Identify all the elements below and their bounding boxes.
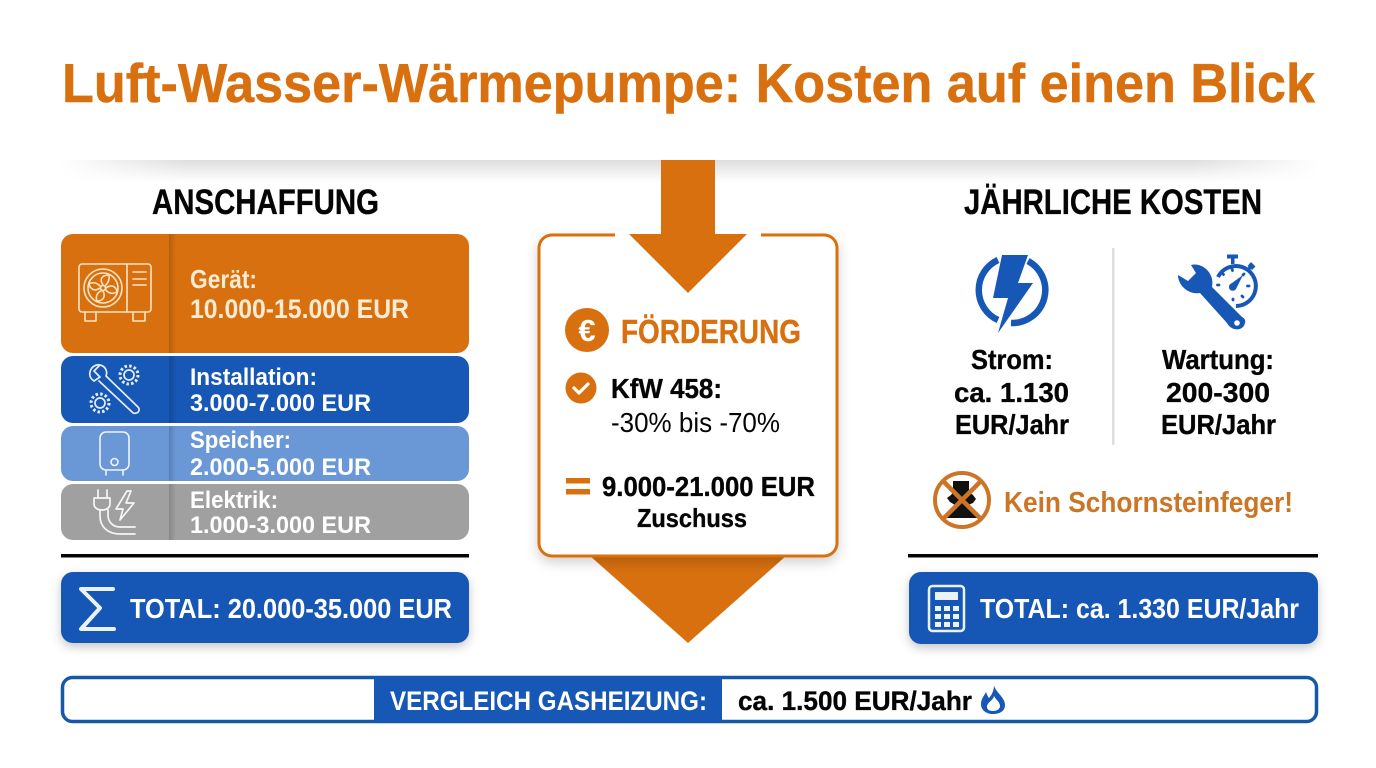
text: Zuschuss: Zuschuss — [637, 503, 747, 533]
arrow: bottom — [589, 555, 787, 643]
icon: euro: € — [578, 313, 596, 348]
row: Speicher — [61, 426, 469, 481]
text: grant amount: 9.000-21.000 EUR — [602, 471, 815, 502]
text: Speicher: Speicher: — [190, 427, 291, 454]
heading: Anschaffung: ANSCHAFFUNG — [152, 183, 379, 222]
icon: sum — [81, 589, 114, 629]
panel: jährliche Kosten — [908, 183, 1318, 644]
value: Speicher: 2.000-5.000 EUR — [190, 454, 371, 481]
panel: Anschaffung — [61, 183, 469, 643]
icon: equals — [566, 478, 590, 494]
text: total: TOTAL: 20.000-35.000 EUR — [130, 593, 452, 624]
text: Wartung unit: EUR/Jahr — [1161, 409, 1276, 440]
icon: check — [566, 372, 596, 404]
text: Strom label: Strom: — [971, 344, 1053, 375]
header shadow — [92, 160, 1288, 176]
box: Förderung — [539, 235, 837, 556]
panel: Förderung — [539, 160, 837, 643]
icon: wrench and gears — [90, 365, 139, 413]
text: Installation: Installation: — [190, 364, 317, 391]
icon: calculator — [929, 586, 964, 631]
text: Elektrik: Elektrik: — [190, 487, 278, 514]
value: Gerät: 10.000-15.000 EUR — [190, 294, 409, 324]
text: Wartung value: 200-300 — [1166, 377, 1270, 408]
text: Strom unit: EUR/Jahr — [955, 409, 1069, 440]
row: Installation — [61, 356, 469, 423]
row: Elektrik — [61, 484, 469, 540]
icon: air-source outdoor unit — [79, 264, 151, 321]
heading: jährliche Kosten: JÄHRLICHE KOSTEN — [964, 183, 1262, 222]
text: Gerät: Gerät: — [190, 264, 257, 294]
value: Elektrik: 1.000-3.000 EUR — [190, 512, 371, 539]
text: KfW 458: KfW 458: — [611, 373, 722, 404]
value: Installation: 3.000-7.000 EUR — [190, 390, 371, 417]
title: Luft-Wasser-Wärmepumpe: Kosten auf einen Blick — [62, 52, 1315, 114]
total box: jährlich — [909, 572, 1318, 644]
icon: lightning — [979, 255, 1045, 333]
arrow: top — [629, 160, 747, 293]
icon: wrench and stopwatch — [1178, 254, 1256, 329]
text: Wartung label: Wartung: — [1162, 344, 1274, 375]
icon: storage tank — [100, 432, 129, 475]
icon: gas flame — [981, 685, 1005, 714]
text: Strom value: ca. 1.130 — [954, 377, 1069, 408]
icon: euro — [565, 308, 609, 352]
text: comparison value: ca. 1.500 EUR/Jahr — [738, 686, 972, 716]
text: percent range: -30% bis -70% — [611, 407, 780, 438]
text: no chimney sweep: Kein Schornsteinfeger! — [1004, 487, 1293, 519]
icon: plug and bolt — [94, 490, 135, 534]
row: Gerät — [61, 234, 469, 353]
comparison bar: Gasheizung — [62, 677, 1316, 722]
icon: no chimney sweep — [935, 473, 989, 527]
text: comparison label: VERGLEICH GASHEIZUNG: — [390, 686, 707, 716]
heading: Förderung: FÖRDERUNG — [621, 313, 801, 350]
text: total: TOTAL: ca. 1.330 EUR/Jahr — [980, 593, 1299, 624]
total box: Anschaffung — [61, 572, 469, 643]
